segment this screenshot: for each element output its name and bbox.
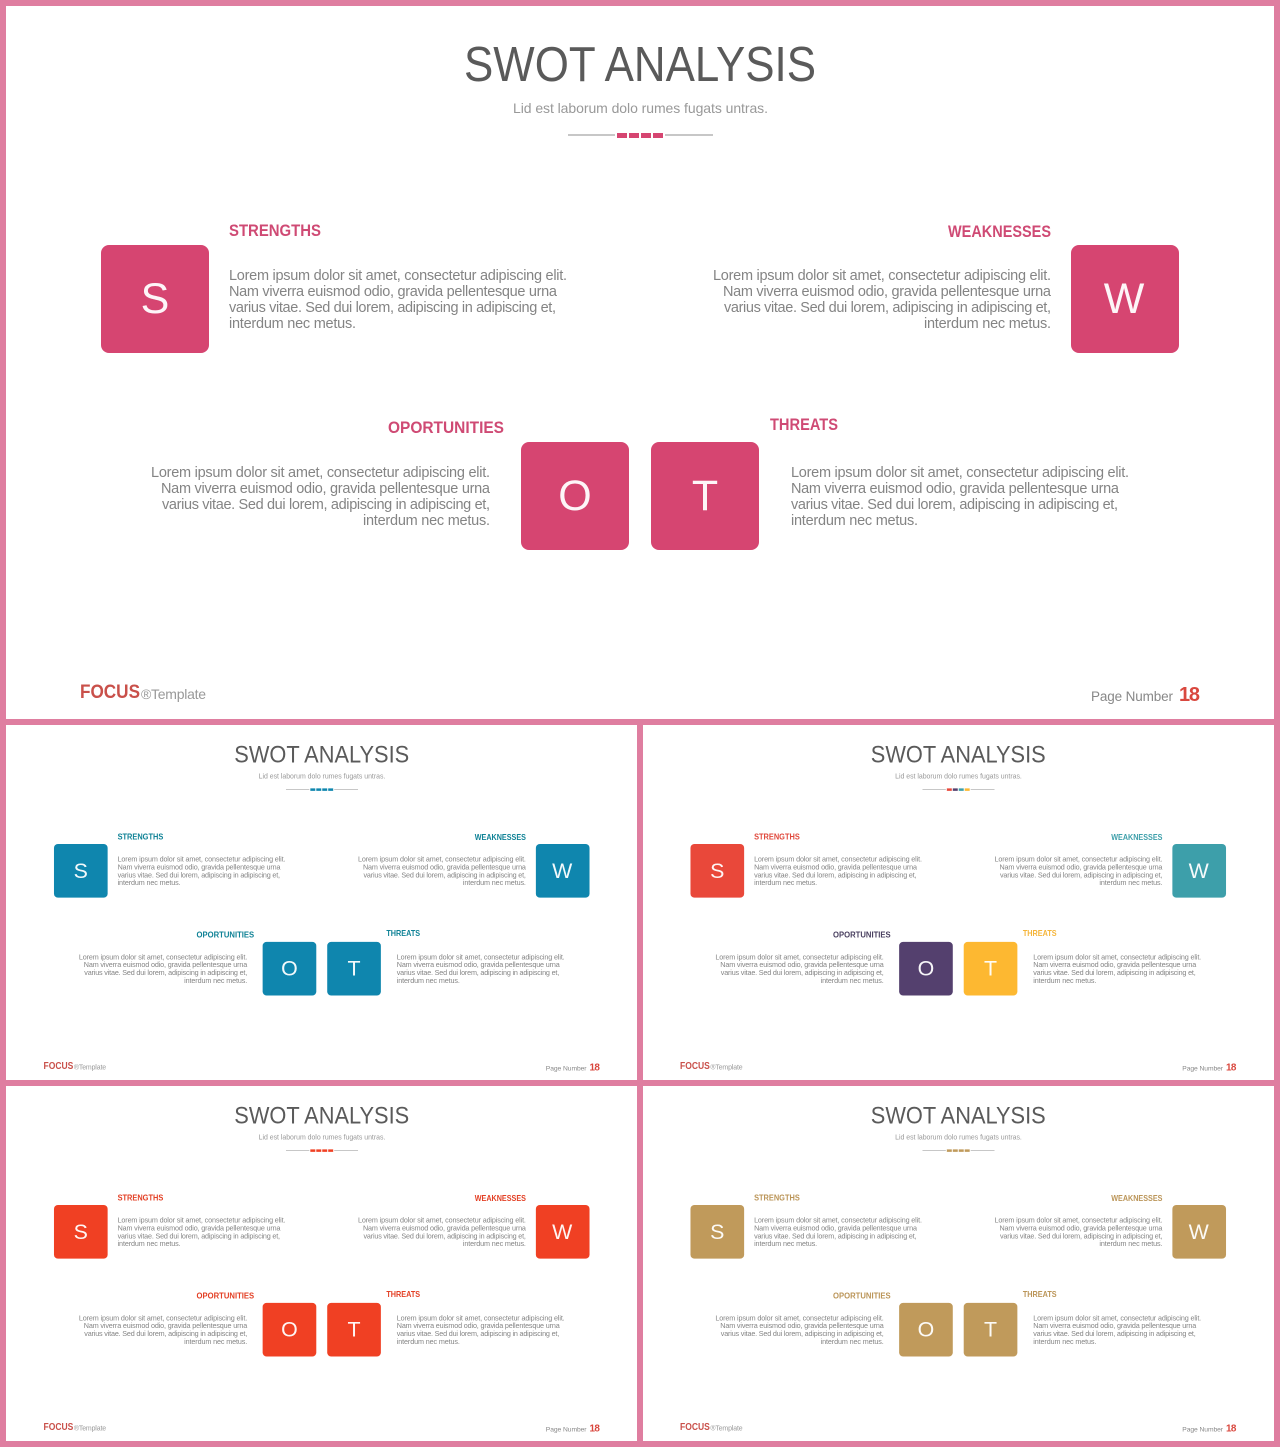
threats icon box [964, 942, 1017, 996]
strengths text: Lorem ipsum dolor sit amet, consectetur adipiscing elit. [229, 268, 567, 284]
page number: 18 [590, 1424, 600, 1435]
threats text: Nam viverra euismod odio, gravida pellentesque urna [1033, 1321, 1196, 1330]
threats icon box: T [692, 472, 718, 520]
threats icon box: T [984, 957, 997, 981]
footer brand [80, 681, 206, 703]
opportunities text: interdum nec metus. [184, 1337, 247, 1346]
threats text: Lorem ipsum dolor sit amet, consectetur adipiscing elit. [397, 952, 565, 961]
weaknesses heading: WEAKNESSES [1111, 1193, 1163, 1203]
strengths text [118, 854, 285, 887]
strengths text: varius vitae. Sed dui lorem, adipiscing in adipiscing et, [754, 870, 917, 879]
weaknesses text: Lorem ipsum dolor sit amet, consectetur adipiscing elit. [713, 268, 1051, 284]
strengths heading: STRENGTHS [754, 832, 800, 842]
opportunities text [79, 1313, 247, 1346]
subtitle: Lid est laborum dolo rumes fugats untras. [895, 773, 1022, 780]
strengths text: Lorem ipsum dolor sit amet, consectetur adipiscing elit. [754, 1215, 922, 1224]
opportunities text: interdum nec metus. [184, 976, 247, 985]
strengths text: Lorem ipsum dolor sit amet, consectetur adipiscing elit. [118, 854, 285, 863]
weaknesses text: Nam viverra euismod odio, gravida pellentesque urna [363, 1223, 526, 1232]
strengths icon box: S [710, 859, 724, 883]
threats text [397, 952, 565, 985]
opportunities icon box [899, 942, 953, 996]
subtitle: Lid est laborum dolo rumes fugats untras. [259, 773, 385, 780]
opportunities text: Lorem ipsum dolor sit amet, consectetur adipiscing elit. [79, 1313, 247, 1322]
page number: Page Number [1182, 1427, 1224, 1434]
footer brand: ®Template [74, 1425, 106, 1433]
threats text: interdum nec metus. [397, 1337, 460, 1346]
threats icon box [651, 442, 759, 550]
weaknesses text [358, 854, 526, 887]
threats text: Lorem ipsum dolor sit amet, consectetur adipiscing elit. [397, 1313, 565, 1322]
threats text: varius vitae. Sed dui lorem, adipiscing in adipiscing et, [397, 1329, 559, 1338]
weaknesses icon box [1071, 245, 1179, 353]
weaknesses text: Nam viverra euismod odio, gravida pellentesque urna [999, 862, 1162, 871]
strengths text: interdum nec metus. [754, 878, 817, 887]
strengths text: varius vitae. Sed dui lorem, adipiscing in adipiscing et, [118, 1231, 280, 1240]
opportunities heading: OPORTUNITIES [833, 1290, 891, 1300]
threats text: interdum nec metus. [791, 513, 918, 529]
opportunities text: interdum nec metus. [821, 1337, 884, 1346]
weaknesses icon box: W [552, 859, 573, 883]
weaknesses icon box: W [1189, 1220, 1210, 1244]
threats text: Lorem ipsum dolor sit amet, consectetur adipiscing elit. [791, 465, 1129, 481]
footer brand: ®Template [710, 1064, 743, 1072]
weaknesses text: varius vitae. Sed dui lorem, adipiscing in adipiscing et, [363, 870, 526, 879]
threats icon box: T [348, 1318, 361, 1342]
strengths text: Nam viverra euismod odio, gravida pellentesque urna [229, 284, 558, 300]
weaknesses text: Nam viverra euismod odio, gravida pellentesque urna [363, 862, 526, 871]
threats heading: THREATS [386, 928, 420, 938]
footer brand [680, 1422, 743, 1433]
threats text: varius vitae. Sed dui lorem, adipiscing in adipiscing et, [1033, 1329, 1196, 1338]
strengths icon box [690, 1205, 744, 1259]
strengths text: Nam viverra euismod odio, gravida pellentesque urna [118, 1223, 281, 1232]
strengths heading: STRENGTHS [754, 1193, 800, 1203]
divider [922, 788, 995, 791]
threats heading: THREATS [1023, 928, 1057, 938]
page number [546, 1063, 600, 1074]
page number [546, 1424, 600, 1435]
strengths text: varius vitae. Sed dui lorem, adipiscing in adipiscing et, [754, 1231, 917, 1240]
weaknesses text: varius vitae. Sed dui lorem, adipiscing in adipiscing et, [724, 300, 1051, 316]
page number [1182, 1063, 1237, 1074]
opportunities text [79, 952, 247, 985]
strengths icon box [690, 844, 744, 898]
subtitle: Lid est laborum dolo rumes fugats untras. [895, 1134, 1022, 1141]
weaknesses icon box [1172, 1205, 1226, 1259]
threats text: varius vitae. Sed dui lorem, adipiscing in adipiscing et, [397, 968, 559, 977]
threats text: Nam viverra euismod odio, gravida pellentesque urna [1033, 960, 1196, 969]
weaknesses text: varius vitae. Sed dui lorem, adipiscing in adipiscing et, [363, 1231, 526, 1240]
strengths text: Nam viverra euismod odio, gravida pellentesque urna [118, 862, 281, 871]
page number: Page Number [546, 1427, 587, 1434]
page number [1182, 1424, 1237, 1435]
footer brand: ®Template [141, 686, 206, 702]
opportunities icon box [521, 442, 629, 550]
footer brand: FOCUS [680, 1061, 710, 1072]
weaknesses text: interdum nec metus. [924, 316, 1051, 332]
opportunities text: varius vitae. Sed dui lorem, adipiscing in adipiscing et, [721, 968, 884, 977]
opportunities text: Lorem ipsum dolor sit amet, consectetur adipiscing elit. [151, 465, 490, 481]
threats text [397, 1313, 565, 1346]
weaknesses text [995, 854, 1162, 887]
weaknesses text: Nam viverra euismod odio, gravida pellentesque urna [723, 284, 1052, 300]
opportunities icon box: O [918, 1318, 934, 1342]
threats text: interdum nec metus. [397, 976, 460, 985]
divider [568, 133, 713, 138]
weaknesses heading: WEAKNESSES [1111, 832, 1163, 842]
footer brand: FOCUS [44, 1422, 74, 1433]
opportunities heading: OPORTUNITIES [197, 1290, 255, 1300]
footer brand: FOCUS [80, 681, 140, 703]
threats icon box [964, 1303, 1017, 1357]
strengths heading: STRENGTHS [229, 221, 321, 240]
threats text: Lorem ipsum dolor sit amet, consectetur adipiscing elit. [1033, 952, 1201, 961]
title: SWOT ANALYSIS [871, 1103, 1046, 1130]
strengths text [754, 1215, 922, 1248]
weaknesses text: varius vitae. Sed dui lorem, adipiscing in adipiscing et, [1000, 870, 1162, 879]
strengths heading: STRENGTHS [118, 832, 164, 842]
weaknesses text [995, 1215, 1162, 1248]
strengths text: Nam viverra euismod odio, gravida pellentesque urna [754, 1223, 917, 1232]
weaknesses text: interdum nec metus. [463, 1239, 526, 1248]
weaknesses heading: WEAKNESSES [475, 1193, 526, 1203]
opportunities text: varius vitae. Sed dui lorem, adipiscing in adipiscing et, [84, 1329, 247, 1338]
opportunities text: interdum nec metus. [821, 976, 884, 985]
title: SWOT ANALYSIS [234, 1103, 409, 1130]
opportunities heading: OPORTUNITIES [197, 929, 255, 939]
weaknesses text: Lorem ipsum dolor sit amet, consectetur adipiscing elit. [995, 854, 1162, 863]
threats text: Lorem ipsum dolor sit amet, consectetur adipiscing elit. [1033, 1313, 1201, 1322]
threats icon box: T [984, 1318, 997, 1342]
threats icon box [327, 1303, 381, 1357]
subtitle: Lid est laborum dolo rumes fugats untras. [513, 100, 768, 116]
title: SWOT ANALYSIS [871, 742, 1046, 769]
panel: blue SWOT slide [6, 725, 637, 1080]
weaknesses text [713, 268, 1052, 332]
weaknesses icon box [536, 844, 590, 898]
footer brand [44, 1422, 106, 1433]
opportunities text: Nam viverra euismod odio, gravida pellentesque urna [720, 960, 884, 969]
opportunities icon box [899, 1303, 953, 1357]
weaknesses icon box [1172, 844, 1226, 898]
weaknesses icon box [536, 1205, 590, 1259]
opportunities text: Nam viverra euismod odio, gravida pellentesque urna [720, 1321, 884, 1330]
page number: Page Number [546, 1066, 587, 1073]
strengths heading: STRENGTHS [118, 1193, 164, 1203]
page number: 18 [1226, 1424, 1237, 1435]
footer brand [680, 1061, 743, 1072]
opportunities text: Lorem ipsum dolor sit amet, consectetur adipiscing elit. [715, 952, 884, 961]
threats text: Nam viverra euismod odio, gravida pellentesque urna [791, 481, 1120, 497]
divider [286, 788, 358, 791]
strengths icon box: S [141, 275, 169, 323]
threats text: varius vitae. Sed dui lorem, adipiscing in adipiscing et, [791, 497, 1118, 513]
panel: red SWOT slide [6, 1086, 637, 1441]
threats text: interdum nec metus. [1033, 976, 1096, 985]
weaknesses text: Lorem ipsum dolor sit amet, consectetur adipiscing elit. [995, 1215, 1162, 1224]
opportunities text: varius vitae. Sed dui lorem, adipiscing in adipiscing et, [721, 1329, 884, 1338]
subtitle: Lid est laborum dolo rumes fugats untras. [259, 1134, 385, 1141]
opportunities icon box: O [918, 957, 934, 981]
title: SWOT ANALYSIS [464, 38, 816, 92]
strengths text: Lorem ipsum dolor sit amet, consectetur adipiscing elit. [118, 1215, 285, 1224]
threats text [1033, 952, 1201, 985]
page number [1091, 684, 1200, 706]
opportunities text: varius vitae. Sed dui lorem, adipiscing in adipiscing et, [84, 968, 247, 977]
strengths icon box [54, 1205, 108, 1259]
divider [286, 1149, 358, 1152]
weaknesses text: interdum nec metus. [463, 878, 526, 887]
footer brand: ®Template [74, 1064, 106, 1072]
threats text: Nam viverra euismod odio, gravida pellentesque urna [397, 1321, 560, 1330]
panel: large pink SWOT slide [6, 6, 1274, 719]
weaknesses text: interdum nec metus. [1099, 1239, 1162, 1248]
weaknesses text: Lorem ipsum dolor sit amet, consectetur adipiscing elit. [358, 854, 526, 863]
strengths icon box: S [74, 1220, 88, 1244]
strengths text: interdum nec metus. [229, 316, 356, 332]
opportunities text [715, 1313, 884, 1346]
strengths icon box: S [710, 1220, 724, 1244]
weaknesses icon box: W [1189, 859, 1210, 883]
opportunities icon box: O [281, 1318, 298, 1342]
threats text [1033, 1313, 1201, 1346]
weaknesses text [358, 1215, 526, 1248]
footer brand [44, 1061, 106, 1072]
page number: Page Number [1091, 689, 1174, 704]
title: SWOT ANALYSIS [234, 742, 409, 769]
page number: 18 [590, 1063, 600, 1074]
opportunities text: varius vitae. Sed dui lorem, adipiscing in adipiscing et, [162, 497, 490, 513]
opportunities heading: OPORTUNITIES [388, 418, 504, 437]
opportunities text: Nam viverra euismod odio, gravida pellentesque urna [84, 1321, 247, 1330]
threats text [791, 465, 1129, 529]
strengths text: varius vitae. Sed dui lorem, adipiscing in adipiscing et, [229, 300, 556, 316]
opportunities heading: OPORTUNITIES [833, 929, 891, 939]
strengths text: Nam viverra euismod odio, gravida pellentesque urna [754, 862, 917, 871]
strengths icon box [101, 245, 209, 353]
weaknesses text: interdum nec metus. [1099, 878, 1162, 887]
strengths icon box [54, 844, 108, 898]
threats icon box: T [348, 957, 361, 981]
panel: multicolour SWOT slide [643, 725, 1274, 1080]
footer brand: FOCUS [680, 1422, 710, 1433]
strengths text: interdum nec metus. [118, 878, 181, 887]
threats text: interdum nec metus. [1033, 1337, 1096, 1346]
opportunities icon box: O [558, 472, 592, 520]
weaknesses text: Lorem ipsum dolor sit amet, consectetur adipiscing elit. [358, 1215, 526, 1224]
page number: 18 [1226, 1063, 1237, 1074]
strengths text: interdum nec metus. [118, 1239, 181, 1248]
opportunities icon box [263, 942, 316, 996]
divider [922, 1149, 995, 1152]
threats heading: THREATS [770, 415, 838, 434]
page number: 18 [1179, 684, 1200, 706]
weaknesses heading: WEAKNESSES [948, 222, 1051, 241]
strengths text: varius vitae. Sed dui lorem, adipiscing in adipiscing et, [118, 870, 280, 879]
strengths text [229, 268, 567, 332]
footer brand: ®Template [710, 1425, 743, 1433]
weaknesses text: Nam viverra euismod odio, gravida pellentesque urna [999, 1223, 1162, 1232]
weaknesses icon box: W [552, 1220, 573, 1244]
panel: tan SWOT slide [643, 1086, 1274, 1441]
strengths icon box: S [74, 859, 88, 883]
strengths text: interdum nec metus. [754, 1239, 817, 1248]
strengths text [118, 1215, 285, 1248]
threats icon box [327, 942, 381, 996]
opportunities text [715, 952, 884, 985]
footer brand: FOCUS [44, 1061, 74, 1072]
weaknesses icon box: W [1104, 275, 1145, 323]
page number: Page Number [1182, 1066, 1224, 1073]
opportunities text: Nam viverra euismod odio, gravida pellentesque urna [84, 960, 247, 969]
threats heading: THREATS [386, 1289, 420, 1299]
opportunities icon box: O [281, 957, 298, 981]
opportunities text [151, 465, 491, 529]
strengths text [754, 854, 922, 887]
opportunities text: Lorem ipsum dolor sit amet, consectetur adipiscing elit. [715, 1313, 884, 1322]
strengths text: Lorem ipsum dolor sit amet, consectetur adipiscing elit. [754, 854, 922, 863]
weaknesses text: varius vitae. Sed dui lorem, adipiscing in adipiscing et, [1000, 1231, 1162, 1240]
opportunities icon box [263, 1303, 316, 1357]
opportunities text: Nam viverra euismod odio, gravida pellentesque urna [161, 481, 491, 497]
opportunities text: interdum nec metus. [363, 513, 490, 529]
threats text: Nam viverra euismod odio, gravida pellentesque urna [397, 960, 560, 969]
threats text: varius vitae. Sed dui lorem, adipiscing in adipiscing et, [1033, 968, 1196, 977]
opportunities text: Lorem ipsum dolor sit amet, consectetur adipiscing elit. [79, 952, 247, 961]
threats heading: THREATS [1023, 1289, 1057, 1299]
weaknesses heading: WEAKNESSES [475, 832, 526, 842]
